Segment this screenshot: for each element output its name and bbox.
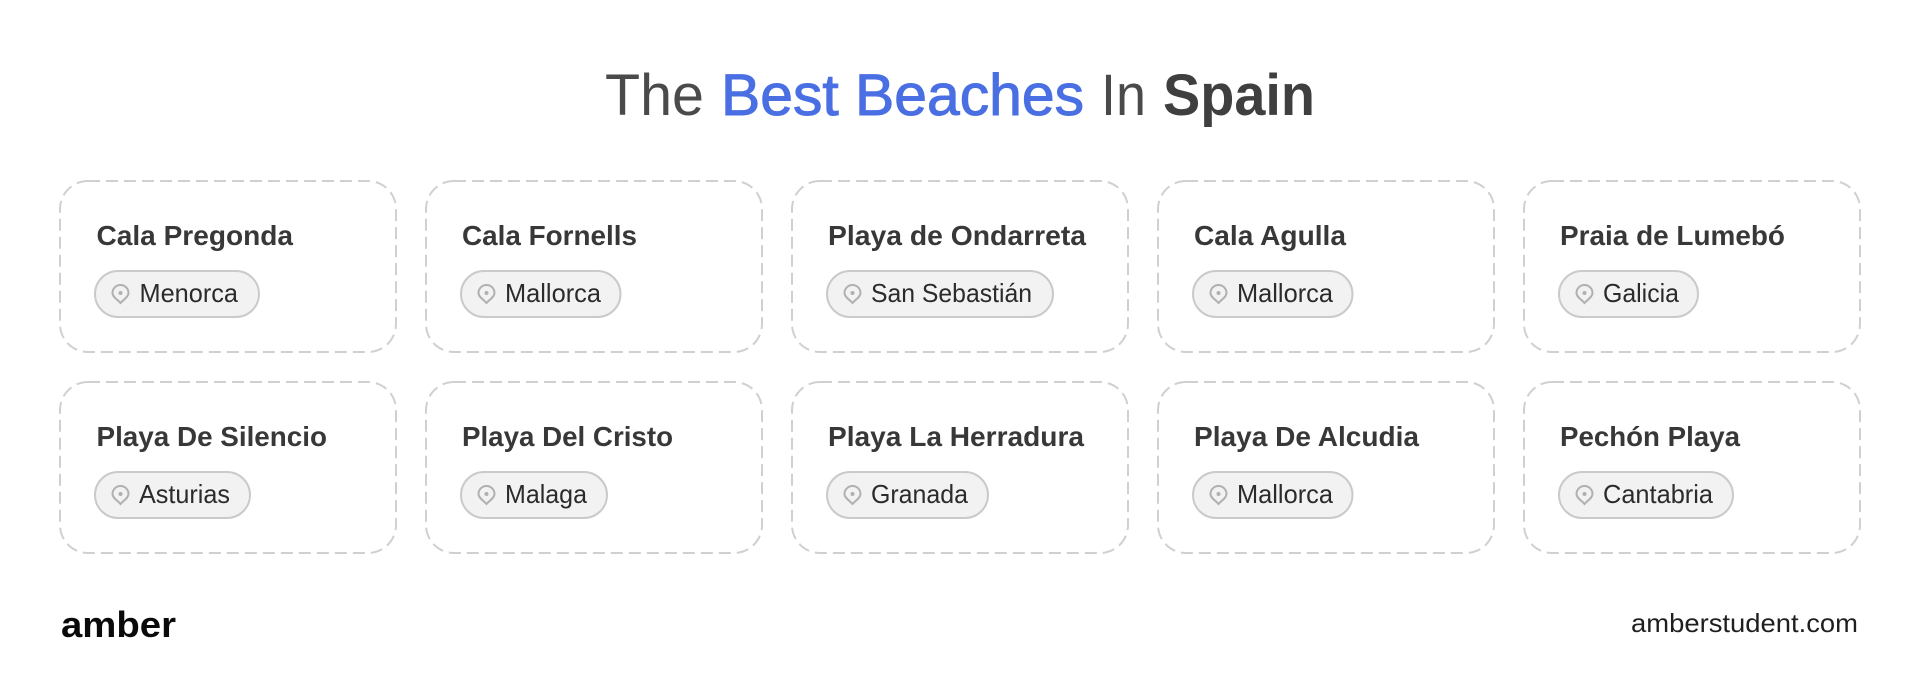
panel: Playa De Silencio: Asturias [139,479,230,509]
panel: Praia de Lumebó: Praia de Lumebó [1560,220,1785,251]
panel: Cala Pregonda [60,181,396,352]
panel: Playa De Silencio: Playa De Silencio [96,421,327,452]
panel: Playa de Ondarreta [792,181,1128,352]
title: The [605,63,704,128]
title: Spain [1163,63,1315,128]
title: In [1101,63,1146,128]
panel: Cala Pregonda: Cala Pregonda [96,220,293,251]
panel: Pechón Playa: Cantabria [1603,479,1714,509]
panel: Praia de Lumebó [1524,181,1860,352]
panel: Playa Del Cristo [426,382,762,553]
panel: Playa Del Cristo: Playa Del Cristo [462,421,673,452]
panel: Cala Agulla: Cala Agulla [1194,220,1346,251]
panel: Playa De Alcudia: Playa De Alcudia [1194,421,1419,452]
panel: Playa de Ondarreta: San Sebastián [871,278,1032,308]
panel: Playa De Alcudia [1158,382,1494,553]
panel: Cala Agulla: Mallorca [1237,278,1334,308]
panel: Playa De Silencio [60,382,396,553]
panel: Pechón Playa: Pechón Playa [1560,421,1740,452]
panel: Playa La Herradura [792,382,1128,553]
panel: Praia de Lumebó: Galicia [1603,278,1680,308]
panel: Cala Fornells: Cala Fornells [462,220,637,251]
panel: Playa De Alcudia: Mallorca [1237,479,1334,509]
panel: Cala Fornells [426,181,762,352]
panel: Playa La Herradura: Granada [871,479,969,509]
panel: Playa Del Cristo: Malaga [505,479,588,509]
website link: amberstudent.com [1631,608,1858,638]
panel: Playa La Herradura: Playa La Herradura [828,421,1084,452]
panel: Cala Fornells: Mallorca [505,278,602,308]
panel: Pechón Playa [1524,382,1860,553]
panel: Playa de Ondarreta: Playa de Ondarreta [828,220,1086,251]
title: Best Beaches [721,63,1084,128]
title [605,63,1315,128]
panel: Cala Agulla [1158,181,1494,352]
panel: Cala Pregonda: Menorca [140,278,239,308]
logo: amber: amber [61,604,176,645]
